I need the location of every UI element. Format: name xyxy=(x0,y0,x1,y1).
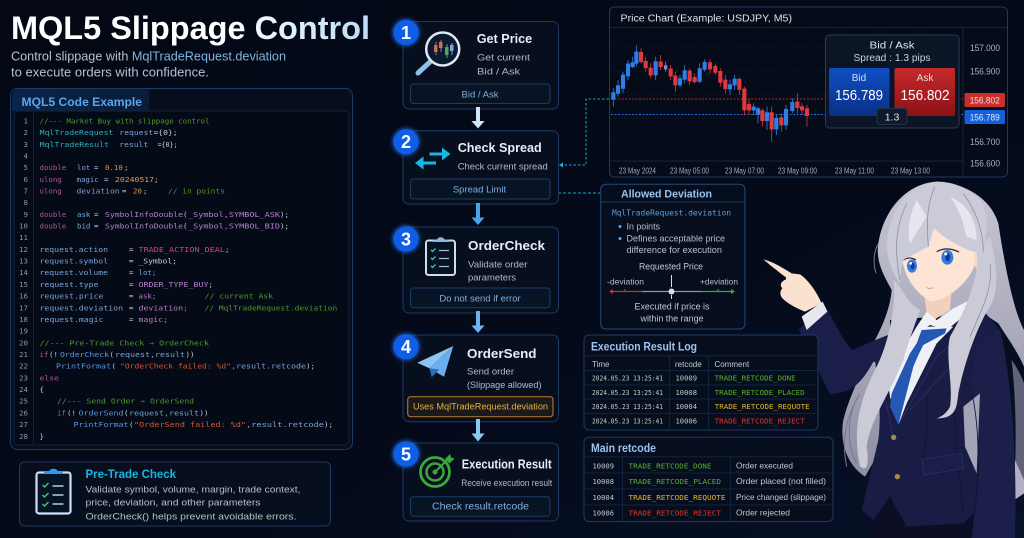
bid and ask lines xyxy=(611,99,964,114)
retcode table: TRADE_RETCODE_DONE xyxy=(628,462,712,470)
code listing: ask; xyxy=(138,292,156,301)
code listing: = xyxy=(129,257,134,266)
log table xyxy=(592,360,810,426)
badge 1: 1 xyxy=(401,23,411,43)
code listing: 14 xyxy=(19,268,29,277)
badge 3 xyxy=(393,226,419,252)
code listing: ); xyxy=(280,222,289,230)
code listing: (! xyxy=(67,408,76,417)
code listing: 13 xyxy=(19,257,28,266)
ask price tag: 156.802 xyxy=(970,96,1000,106)
connector: spread limit to deviation xyxy=(558,192,600,194)
price axis labels xyxy=(970,43,1000,170)
retcode table: 10006 xyxy=(592,508,614,518)
badge 3: 3 xyxy=(401,230,411,250)
code listing: 11 xyxy=(19,233,28,242)
ask box: Ask xyxy=(917,73,934,84)
log table: TRADE_RETCODE_PLACED xyxy=(715,388,805,397)
retcode table: TRADE_RETCODE_PLACED xyxy=(628,477,721,486)
jacket sleeve xyxy=(798,305,897,394)
price axis labels: 157.000 xyxy=(970,43,1000,54)
log table: TRADE_RETCODE_REQUOTE xyxy=(715,402,810,411)
code listing: 6 xyxy=(24,175,28,184)
code listing: 23 xyxy=(19,373,28,382)
description xyxy=(86,484,300,522)
step description: (Slippage allowed) xyxy=(467,380,542,391)
code listing: deviation xyxy=(76,186,120,196)
panel: execution result log xyxy=(584,335,818,430)
log table: TRADE_RETCODE_DONE xyxy=(715,374,796,382)
time axis labels: 23 May 05:00 xyxy=(670,166,710,176)
icon: target xyxy=(420,454,454,486)
code listing xyxy=(19,116,337,441)
step description: Get current xyxy=(477,52,530,64)
retcode table: Order executed xyxy=(736,460,793,470)
lapel lines xyxy=(878,333,970,437)
code listing: = xyxy=(129,315,134,324)
code listing: 2 xyxy=(24,128,28,137)
code listing: request.action xyxy=(40,245,108,254)
code listing: = xyxy=(122,186,127,196)
code listing: ={0}; xyxy=(154,140,178,149)
log table: retcode xyxy=(675,360,702,369)
code listing: 20 xyxy=(19,338,28,347)
deviation diagram: -deviation xyxy=(607,276,644,286)
step 5: execution result xyxy=(403,443,558,521)
code listing: MqlTradeRequest xyxy=(40,128,114,137)
code listing: //--- Send Order → OrderSend xyxy=(57,397,194,406)
log table: TRADE_RETCODE_REJECT xyxy=(715,416,805,426)
panel heading: Allowed Deviation xyxy=(621,188,712,200)
code listing: else xyxy=(40,373,60,382)
step heading: Get Price xyxy=(477,31,532,46)
jacket buttons and pocket xyxy=(891,435,963,479)
code listing: //--- Pre-Trade Check → OrderCheck xyxy=(40,338,210,347)
neck xyxy=(923,290,952,323)
code listing: if xyxy=(40,350,48,359)
code listing: magic xyxy=(76,175,99,184)
retcode table: Order rejected xyxy=(736,508,790,518)
log table: Time xyxy=(592,360,610,369)
icon: paper plane xyxy=(417,346,453,377)
code listing: 3 xyxy=(24,140,28,149)
panel: pre-trade check xyxy=(20,462,330,526)
code listing: 12 xyxy=(19,245,28,254)
icon: clipboard xyxy=(36,469,70,514)
code listing: 17 xyxy=(19,303,28,312)
code listing: )) xyxy=(200,408,208,417)
code listing: 26 xyxy=(19,408,28,417)
code listing: ; xyxy=(124,163,128,172)
code listing: = xyxy=(94,210,99,219)
code listing: 19 xyxy=(19,327,28,336)
code listing: if xyxy=(57,408,66,417)
badge 4: 4 xyxy=(401,337,411,357)
code listing: ,result.retcode xyxy=(246,420,325,429)
code listing: 25 xyxy=(19,397,28,406)
code listing: 8 xyxy=(24,198,28,207)
step tag: Spread Limit xyxy=(453,184,507,196)
code listing: request.symbol xyxy=(40,257,108,266)
arrow 1 to 2 xyxy=(472,107,484,128)
deviation diagram: +deviation xyxy=(700,276,738,286)
description: price, deviation, and other parameters xyxy=(86,498,261,508)
deviation diagram: Executed if price is xyxy=(634,302,710,312)
code listing: 15 xyxy=(19,280,28,289)
code listing: 4 xyxy=(24,151,29,160)
step description: parameters xyxy=(468,272,516,284)
step description: Bid / Ask xyxy=(477,66,520,78)
code listing: ); xyxy=(280,210,289,219)
description: OrderCheck() helps prevent avoidable errors. xyxy=(86,512,296,522)
icon: magnifier with candles xyxy=(418,32,459,73)
step heading: Check Spread xyxy=(458,140,542,155)
code listing: // current Ask xyxy=(205,292,274,301)
heading: pre-trade check: Pre-Trade Check xyxy=(86,467,176,481)
panel: price chart xyxy=(610,7,1008,177)
bid/ask overlay xyxy=(826,35,959,128)
retcode table xyxy=(592,460,826,518)
panel heading: Main retcode xyxy=(591,441,656,455)
spread value: Spread : 1.3 pips xyxy=(854,53,930,64)
jacket body xyxy=(862,307,1016,538)
code listing: ; xyxy=(208,280,213,289)
log table: 2024.05.23 13:25:41 xyxy=(592,374,663,382)
code listing: SymbolInfoDouble xyxy=(105,210,184,219)
face xyxy=(902,226,977,302)
badge 5 xyxy=(393,441,419,467)
shirt cuff xyxy=(802,302,827,330)
code listing: 28 xyxy=(19,432,28,441)
ask price tag xyxy=(964,93,1005,107)
code listing: _Symbol,SYMBOL_BID xyxy=(188,222,280,230)
field name: MqlTradeRequest.deviation xyxy=(612,208,731,218)
code listing: ulong xyxy=(40,186,62,196)
step 4: ordersend xyxy=(403,335,558,422)
code listing: 10 xyxy=(19,222,28,230)
chart title: Price Chart (Example: USDJPY, M5) xyxy=(620,12,792,24)
code listing: ulong xyxy=(40,175,62,184)
code listing: ( xyxy=(129,420,133,429)
panel: allowed deviation xyxy=(601,184,745,329)
code listing: SymbolInfoDouble xyxy=(105,222,184,230)
bullet list xyxy=(618,222,725,255)
step 1: get price xyxy=(403,22,558,109)
code listing: _Symbol,SYMBOL_ASK xyxy=(188,210,281,219)
code listing: request,result xyxy=(129,408,199,417)
code listing: "OrderSend failed: %d" xyxy=(134,420,246,429)
step description: Check current spread xyxy=(458,162,548,172)
step description: Validate order xyxy=(468,260,528,270)
code listing: _Symbol; xyxy=(138,257,177,266)
code listing: TRADE_ACTION_DEAL xyxy=(138,245,226,254)
code listing: ORDER_TYPE_BUY xyxy=(138,280,209,289)
badge 5: 5 xyxy=(401,444,411,464)
code listing: 24 xyxy=(19,385,29,394)
code listing: ); xyxy=(324,420,333,429)
code listing: = xyxy=(94,163,99,172)
code listing: double xyxy=(40,222,67,230)
code listing: = xyxy=(104,175,109,184)
code listing: magic; xyxy=(138,315,168,324)
character illustration xyxy=(763,182,1024,538)
retcode table: Order placed (not filled) xyxy=(736,476,826,486)
shirt xyxy=(887,327,953,425)
panel: main retcode xyxy=(584,437,833,522)
collar xyxy=(917,298,973,330)
code listing: ; xyxy=(225,245,229,254)
log table: 10004 xyxy=(676,402,698,411)
log table: 10008 xyxy=(676,388,697,397)
log table: 10009 xyxy=(676,374,697,382)
step tag: Bid / Ask xyxy=(462,90,499,100)
price axis labels: 156.900 xyxy=(970,66,1000,78)
log table: 2024.05.23 13:25:41 xyxy=(592,402,663,411)
code listing: ( xyxy=(110,350,114,359)
code listing: request xyxy=(119,128,153,137)
time axis labels: 23 May 11:00 xyxy=(835,166,875,176)
code listing: (! xyxy=(49,350,58,359)
step tag: Check result.retcode xyxy=(432,502,529,512)
code listing: OrderSend xyxy=(78,408,124,417)
code listing: OrderCheck xyxy=(60,350,110,359)
retcode table: Price changed (slippage) xyxy=(736,492,826,502)
code listing: lot; xyxy=(138,268,156,277)
code listing: { xyxy=(40,385,44,394)
step tag: Uses MqlTradeRequest.deviation xyxy=(413,402,548,412)
code listing: 18 xyxy=(19,315,28,324)
badge 4 xyxy=(393,334,419,360)
code listing: 21 xyxy=(19,350,28,359)
bid box: 156.789 xyxy=(835,88,883,104)
code listing: ( xyxy=(112,362,116,371)
bid price tag: 156.789 xyxy=(970,112,1000,124)
code listing: 16 xyxy=(19,292,28,301)
bullet list: Defines acceptable price xyxy=(626,234,725,244)
deviation diagram: within the range xyxy=(640,314,704,324)
code listing: PrintFormat xyxy=(74,420,128,429)
step description: Receive execution result xyxy=(461,478,553,489)
code listing: request.type xyxy=(40,280,99,289)
code listing: request.magic xyxy=(40,315,104,324)
icon: clipboard xyxy=(426,237,455,275)
spread chip: 1.3 xyxy=(885,112,899,124)
bullet list: In points xyxy=(626,222,660,232)
step 2: check spread xyxy=(403,131,558,204)
code listing: = xyxy=(129,268,134,277)
log table: 2024.05.23 13:25:41 xyxy=(592,388,663,397)
step description xyxy=(468,260,528,284)
code listing: "OrderCheck failed: %d" xyxy=(120,362,231,371)
code listing: 20240517 xyxy=(115,175,154,184)
code listing: 20 xyxy=(133,186,142,196)
code listing: deviation; xyxy=(138,303,188,312)
step heading: OrderCheck xyxy=(468,238,546,253)
step tag: Do not send if error xyxy=(439,294,521,304)
code listing: MqlTradeResult xyxy=(40,140,109,149)
deviation diagram: Requested Price xyxy=(639,262,703,272)
arrow 4 to 5 xyxy=(472,419,484,442)
code listing: 7 xyxy=(24,186,28,196)
retcode table: TRADE_RETCODE_REQUOTE xyxy=(628,493,726,502)
necktie xyxy=(890,328,947,425)
time axis labels: 23 May 13:00 xyxy=(891,166,931,176)
ask box xyxy=(894,68,955,116)
code listing: ; xyxy=(143,186,147,196)
log table: 10006 xyxy=(676,416,697,426)
front hair xyxy=(857,182,996,468)
code listing: )) xyxy=(186,350,194,359)
code listing: 22 xyxy=(19,362,28,371)
log table: Comment xyxy=(714,360,750,369)
pointing hand xyxy=(763,259,822,312)
time axis labels xyxy=(619,166,931,176)
retcode table: 10009 xyxy=(592,462,614,470)
code listing: 9 xyxy=(24,210,28,219)
code listing: ( xyxy=(124,408,128,417)
retcode table: TRADE_RETCODE_REJECT xyxy=(628,508,722,518)
code listing: ( xyxy=(183,222,187,230)
code listing: PrintFormat xyxy=(56,362,111,371)
icon: spread arrows xyxy=(415,148,450,170)
code listing: ,result.retcode xyxy=(231,362,307,371)
code listing: 27 xyxy=(19,420,28,429)
panel: MQL5 code example xyxy=(10,88,352,450)
bullet list: difference for execution xyxy=(626,245,722,255)
candlesticks xyxy=(612,45,809,142)
step description: Send order xyxy=(467,366,514,378)
bid price tag xyxy=(964,110,1005,124)
price axis labels: 156.600 xyxy=(970,158,1000,170)
connector: chart to check spread xyxy=(562,99,609,165)
code listing: = xyxy=(129,245,134,254)
retcode table: 10004 xyxy=(592,493,615,502)
badge 2: 2 xyxy=(401,132,411,152)
code listing: // MqlTradeRequest.deviation xyxy=(205,303,337,312)
code listing: request.deviation xyxy=(40,303,123,312)
heading: code example: MQL5 Code Example xyxy=(22,97,142,109)
panel heading: Execution Result Log xyxy=(591,340,697,354)
step 3: ordercheck xyxy=(403,227,558,313)
badge 2 xyxy=(393,129,419,155)
code listing: request.volume xyxy=(40,268,109,277)
step description xyxy=(477,52,530,78)
code listing: = xyxy=(94,222,99,230)
subtitle: to execute orders with confidence. xyxy=(11,66,209,80)
code listing: result xyxy=(119,140,148,149)
code listing: bid xyxy=(77,222,90,230)
code listing: } xyxy=(40,432,44,441)
bid box: Bid xyxy=(852,73,866,84)
badge 1 xyxy=(393,20,419,46)
deviation diagram xyxy=(607,262,738,324)
code listing: = xyxy=(129,292,134,301)
code listing: ask xyxy=(77,210,91,219)
bid box xyxy=(829,68,890,116)
code listing: 1 xyxy=(24,116,28,125)
description: Validate symbol, volume, margin, trade context, xyxy=(86,484,300,496)
overlay heading: Bid / Ask xyxy=(870,40,915,52)
code listing: 5 xyxy=(24,163,28,172)
arrow 3 to 4 xyxy=(472,311,484,333)
connector arrowhead xyxy=(559,162,563,168)
code listing: ; xyxy=(154,175,158,184)
code listing: lot xyxy=(77,163,90,172)
code listing: = xyxy=(129,280,134,289)
code listing: ={0}; xyxy=(154,128,178,137)
title: MQL5 Slippage Control xyxy=(11,10,370,46)
subtitle: Control slippage with MqlTradeRequest.deviation xyxy=(11,50,286,64)
ask box: 156.802 xyxy=(900,88,950,104)
price axis labels: 156.700 xyxy=(970,137,1000,148)
code listing: double xyxy=(40,163,67,172)
code listing: request,result xyxy=(115,350,185,359)
step heading: Execution Result xyxy=(462,458,552,472)
step heading: OrderSend xyxy=(467,346,537,361)
code listing: //--- Market Buy with slippage control xyxy=(40,116,210,125)
code listing: request.price xyxy=(40,292,104,301)
back hair xyxy=(842,182,1024,501)
log table: 2024.05.23 13:25:41 xyxy=(592,416,663,426)
time axis labels: 23 May 2024 xyxy=(619,166,657,176)
step description xyxy=(467,366,542,391)
code listing: ); xyxy=(306,362,315,371)
time axis labels: 23 May 07:00 xyxy=(725,166,765,176)
code listing: ( xyxy=(183,210,187,219)
code listing: // in points xyxy=(168,186,225,196)
code listing: = xyxy=(129,303,134,312)
ear xyxy=(974,251,983,269)
arrow 2 to 3 xyxy=(472,203,484,225)
code listing: double xyxy=(40,210,67,219)
eyes xyxy=(903,249,959,288)
retcode table: 10008 xyxy=(592,477,614,486)
subtitle xyxy=(11,50,286,80)
time axis labels: 23 May 09:00 xyxy=(778,166,818,176)
code listing: 0.10 xyxy=(105,163,123,172)
